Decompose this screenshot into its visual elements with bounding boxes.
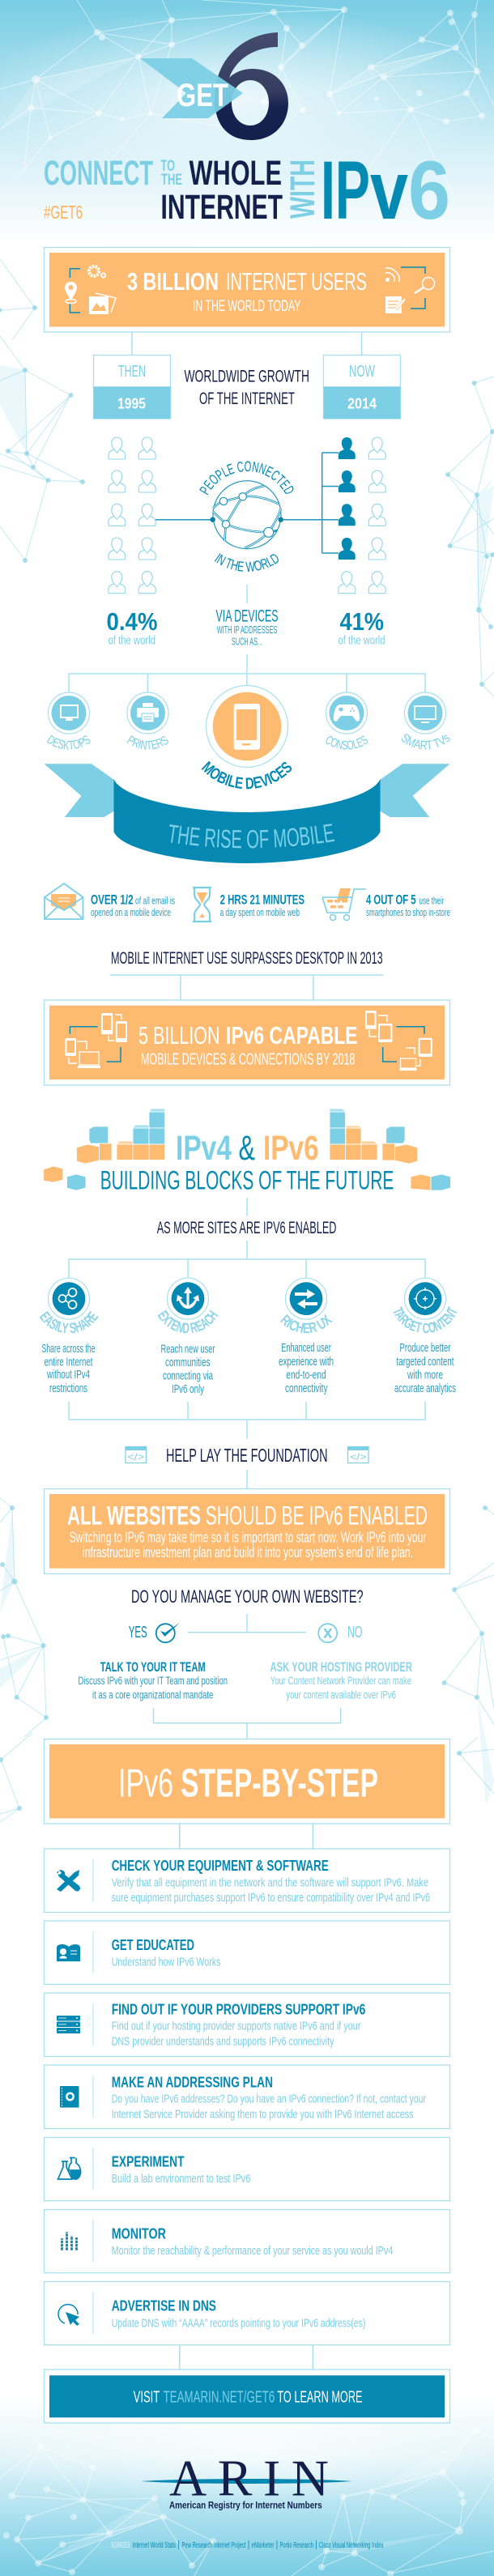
sources: SOURCES: xyxy=(111,2541,131,2550)
device: consoles: CONSOLES xyxy=(326,735,368,750)
text: target content xyxy=(394,1342,456,1395)
logo: ARIN: American Registry for Internet Numbers xyxy=(169,2499,322,2510)
step: monitor xyxy=(44,2209,450,2273)
text: richer UX: connectivity xyxy=(285,1382,328,1395)
panel: visit teamarin.net/get6 xyxy=(44,2369,450,2423)
stat: email: of all email is xyxy=(135,895,175,907)
panel: 5 billion IPv6 capable: MOBILE DEVICES & CONNECTIONS BY 2018 xyxy=(141,1050,355,1068)
icon: cart xyxy=(322,888,366,920)
sources: Pew Research Internet Project xyxy=(181,2541,246,2550)
heading: IPv4 & IPv6: & xyxy=(238,1129,255,1168)
text: extend reach: Reach new user xyxy=(160,1343,215,1356)
panel: IPv6 step-by-step: IPv6 xyxy=(118,1761,173,1805)
text: via devices: WITH IP ADDRESSES xyxy=(217,624,278,636)
stat: 0.4%: 0.4% xyxy=(107,607,157,636)
device: mobile devices: MOBILE DEVICES xyxy=(201,761,292,789)
text: target content: targeted content xyxy=(397,1356,454,1369)
panel: 5 billion IPv6 capable: IPv6 CAPABLE xyxy=(226,1021,358,1050)
sources: Cisco Visual Networking Index xyxy=(319,2541,384,2550)
text: extend reach: connecting via xyxy=(163,1370,214,1383)
text: richer UX xyxy=(279,1342,334,1395)
device: desktops: DESKTOPS xyxy=(47,735,91,750)
stat: email: opened on a mobile device xyxy=(91,906,171,918)
logo: Get6 xyxy=(140,32,288,140)
text: talk to your IT team: Discuss IPv6 with your IT Team and position xyxy=(78,1675,228,1687)
panel: visit teamarin.net/get6: TEAMARIN.NET/GET6 xyxy=(164,2389,275,2407)
panel: now 2014: 2014 xyxy=(347,394,377,411)
icon: binder xyxy=(60,2086,79,2107)
connectors: to visit box xyxy=(180,2345,313,2369)
connectors: to step-by-step xyxy=(154,1708,341,1739)
text: easily share: entire Internet xyxy=(44,1356,92,1369)
icon: code window left: </> xyxy=(128,1451,144,1463)
connector: to sites heading xyxy=(246,1198,248,1216)
title: connect to the whole internet with IPv6 xyxy=(44,144,450,236)
text: via devices: SUCH AS... xyxy=(232,636,262,648)
panel: all websites should be IPv6 enabled xyxy=(44,1488,450,1574)
title: connect to the whole internet with IPv6: CONNECT xyxy=(44,154,153,193)
benefit: target content xyxy=(394,1278,457,1395)
text: via devices: VIA DEVICES xyxy=(215,607,279,626)
step: advertise in DNS: ADVERTISE IN DNS xyxy=(112,2297,216,2314)
sources xyxy=(111,2540,384,2550)
text: easily share: Share across the xyxy=(42,1343,96,1356)
device: printers xyxy=(126,692,169,750)
text: target content: with more xyxy=(407,1369,443,1382)
text: ask your hosting provider: Your Content Network Provider can make xyxy=(270,1675,411,1687)
icon: code window left xyxy=(126,1446,146,1463)
stat: 41% xyxy=(339,607,385,648)
device: desktops xyxy=(47,692,91,750)
background: bottom gradient xyxy=(0,2397,494,2576)
heading: IPv4 & IPv6: IPv4 xyxy=(176,1129,232,1168)
text: target content: Produce better xyxy=(400,1342,451,1355)
title: connect to the whole internet with IPv6: TO xyxy=(160,158,175,175)
heading: help lay the foundation xyxy=(126,1445,368,1466)
people grid: then xyxy=(109,437,155,594)
title: connect to the whole internet with IPv6: THE xyxy=(161,172,182,189)
stat: email: OVER 1/2 xyxy=(91,892,134,908)
panel: visit teamarin.net/get6: VISIT xyxy=(134,2389,160,2407)
ribbon: the rise of mobile: THE RISE OF MOBILE xyxy=(169,824,335,849)
icon: envelope xyxy=(45,884,83,919)
step: check your equipment: CHECK YOUR EQUIPMENT & SOFTWARE xyxy=(112,1857,329,1874)
step: get educated xyxy=(44,1921,450,1984)
choice: yes xyxy=(129,1623,180,1642)
step: find out if your providers support IPv6: Find out if your hosting provider supports native IPv6 and if your xyxy=(112,2020,360,2033)
illustration: building blocks right xyxy=(330,1109,450,1190)
title: connect to the whole internet with IPv6: IP xyxy=(321,144,370,236)
text: richer UX: Enhanced user xyxy=(281,1342,331,1355)
heading: worldwide growth: WORLDWIDE GROWTH xyxy=(185,368,309,386)
logo: Get6: GET xyxy=(177,78,228,113)
stat: 41%: 41% xyxy=(340,607,384,636)
background: top gradient xyxy=(0,0,494,243)
people grid: now xyxy=(339,437,385,594)
stat: shopping xyxy=(322,888,450,920)
step: advertise in DNS: Update DNS with “AAAA” records pointing to your IPv6 address(es) xyxy=(112,2316,365,2330)
heading: IPv4 & IPv6: IPv6 xyxy=(263,1129,319,1168)
network pattern: bottom xyxy=(0,2428,494,2576)
icon: flasks xyxy=(58,2157,81,2179)
heading: worldwide growth: OF THE INTERNET xyxy=(199,390,295,408)
icon: arrows outward xyxy=(177,1287,199,1309)
benefit: extend reach xyxy=(157,1278,219,1396)
icon: share xyxy=(58,1288,76,1309)
heading: worldwide growth xyxy=(185,368,309,408)
stat: hours per day: a day spent on mobile web xyxy=(220,906,300,918)
panel: all websites should be IPv6 enabled: ALL WEBSITES xyxy=(67,1501,201,1531)
text: easily share: restrictions xyxy=(49,1382,87,1395)
text: target content: accurate analytics xyxy=(394,1382,456,1395)
panel: then 1995 xyxy=(94,355,170,419)
device: consoles xyxy=(326,692,368,750)
choice: no xyxy=(318,1624,363,1642)
stat: email xyxy=(45,884,175,919)
icon: exchange arrows xyxy=(295,1289,317,1309)
title: connect to the whole internet with IPv6: 6 xyxy=(408,144,450,236)
icons: right devices xyxy=(365,1011,432,1071)
sources: Portio Research xyxy=(280,2541,313,2550)
hashtag: #GET6 xyxy=(44,202,83,223)
title: connect to the whole internet with IPv6: v xyxy=(370,144,408,236)
panel: IPv6 step-by-step: STEP-BY-STEP xyxy=(181,1761,378,1805)
step: find out if your providers support IPv6: FIND OUT IF YOUR PROVIDERS SUPPORT IPv6 xyxy=(112,2001,365,2018)
benefit: target content: TARGET CONTENT xyxy=(394,1306,457,1333)
text: extend reach xyxy=(160,1343,215,1396)
icon: hourglass xyxy=(193,888,211,922)
connectors: benefits tree bottom xyxy=(69,1402,425,1439)
connector lines: people to globe xyxy=(155,453,339,553)
device: smart TVs: SMART TVs xyxy=(402,734,450,750)
step: monitor: Monitor the reachability & performance of your service as you would IPv4 xyxy=(112,2244,393,2258)
heading: help lay the foundation: HELP LAY THE FOUNDATION xyxy=(166,1445,328,1466)
network pattern: top xyxy=(0,0,494,194)
connectors: first box to then/now xyxy=(132,330,362,355)
text: ask your hosting provider: your content available over IPv6 xyxy=(286,1688,396,1701)
text: talk to your IT team: TALK TO YOUR IT TEAM xyxy=(100,1659,206,1675)
title: connect to the whole internet with IPv6: INTERNET xyxy=(160,188,283,227)
panel: now 2014: NOW xyxy=(349,363,375,381)
title: connect to the whole internet with IPv6: WITH xyxy=(283,160,322,219)
step: monitor: MONITOR xyxy=(112,2225,166,2242)
benefit: easily share xyxy=(39,1278,99,1395)
heading: IPv4 & IPv6 xyxy=(176,1129,319,1168)
step: advertise in DNS xyxy=(44,2282,450,2345)
curved label: people connected: PEOPLE CONNECTED xyxy=(199,461,293,496)
stat: 41%: of the world xyxy=(339,634,385,648)
connectors: yes/no fork xyxy=(188,1614,306,1633)
text: extend reach: IPv6 only xyxy=(172,1383,204,1396)
text: richer UX: end-to-end xyxy=(286,1369,326,1382)
globe: people connected in the world xyxy=(199,461,293,572)
step: get educated: Understand how IPv6 Works xyxy=(112,1955,220,1969)
panel: 3 billion internet users: 3 BILLION xyxy=(127,267,219,296)
stat: hours per day: 2 HRS 21 MINUTES xyxy=(220,892,304,908)
benefit: extend reach: EXTEND REACH xyxy=(157,1310,219,1333)
sources: Internet World Stats xyxy=(132,2541,176,2550)
icon: tools xyxy=(57,1870,80,1892)
stat: shopping: 4 OUT OF 5 xyxy=(366,892,416,908)
title: connect to the whole internet with IPv6: WHOLE xyxy=(190,154,282,193)
curved label: in the world: IN THE WORLD xyxy=(214,553,279,572)
benefit: easily share: EASILY SHARE xyxy=(39,1310,99,1333)
step: experiment: Build a lab environment to test IPv6 xyxy=(112,2172,250,2186)
step: find out if your providers support IPv6 xyxy=(44,1993,450,2057)
text: easily share xyxy=(42,1343,96,1395)
choice: yes: YES xyxy=(129,1624,147,1641)
connectors: to steps xyxy=(180,1824,313,1849)
panel: visit teamarin.net/get6: TO LEARN MORE xyxy=(277,2389,363,2407)
icon: code window right xyxy=(348,1446,368,1463)
stat: 0.4% xyxy=(107,607,157,648)
network pattern: left and right side, lower xyxy=(0,1498,494,1822)
icon: server xyxy=(57,2016,80,2033)
benefit: richer UX: RICHER UX xyxy=(280,1314,332,1333)
text: ask your hosting provider: ASK YOUR HOSTING PROVIDER xyxy=(270,1659,412,1675)
panel: 3 billion internet users: IN THE WORLD TODAY xyxy=(193,297,301,315)
panel: 3 billion internet users xyxy=(44,248,450,332)
network pattern: left and right side, upper xyxy=(0,259,494,696)
device: smart TVs xyxy=(402,692,450,750)
icon: cursor click xyxy=(58,2305,79,2326)
icon: book xyxy=(57,1944,80,1961)
panel: then 1995: THEN xyxy=(118,363,146,381)
device: mobile devices xyxy=(201,685,292,789)
icon: level bars xyxy=(62,2232,76,2250)
background: bottom glow xyxy=(0,2389,494,2502)
icons: left devices xyxy=(65,1013,127,1068)
connectors: benefits tree top xyxy=(69,1241,425,1278)
panel: now 2014 xyxy=(324,355,400,419)
logo: ARIN: ARIN xyxy=(169,2450,329,2507)
icon: target xyxy=(414,1288,437,1309)
text: via devices xyxy=(215,607,279,648)
stat: shopping: use their xyxy=(419,895,445,907)
stat: 0.4%: of the world xyxy=(109,634,155,648)
text: talk to your IT team: it as a core organizational mandate xyxy=(92,1688,213,1701)
text: extend reach: communities xyxy=(165,1356,211,1369)
icon: code window right: </> xyxy=(350,1451,366,1463)
panel: then 1995: 1995 xyxy=(117,394,146,411)
step: get educated: GET EDUCATED xyxy=(112,1936,194,1953)
heading: as more sites are IPv6 enabled: AS MORE SITES ARE IPV6 ENABLED xyxy=(157,1219,337,1237)
choice: no: NO xyxy=(347,1624,363,1641)
connectors: devices tree xyxy=(69,585,425,692)
illustration: building blocks left xyxy=(44,1109,165,1190)
step: make an addressing plan: MAKE AN ADDRESSING PLAN xyxy=(112,2073,273,2090)
step: experiment: EXPERIMENT xyxy=(112,2153,185,2170)
heading: do you manage your own website: DO YOU MANAGE YOUR OWN WEBSITE? xyxy=(131,1586,364,1607)
panel: 5 billion IPv6 capable xyxy=(44,1000,450,1085)
panel: IPv6 step-by-step xyxy=(44,1739,450,1824)
icons: left cluster xyxy=(65,266,116,314)
stat: hours per day xyxy=(193,888,304,922)
benefit: richer UX xyxy=(279,1278,334,1395)
panel: 3 billion internet users: INTERNET USERS xyxy=(226,267,367,296)
step: find out if your providers support IPv6: DNS provider understands and supports IPv6 connectivity xyxy=(112,2035,334,2049)
ribbon: the rise of mobile xyxy=(44,764,450,863)
background: top glow xyxy=(0,8,494,186)
panel: 5 billion IPv6 capable: 5 BILLION xyxy=(138,1021,220,1050)
step: check your equipment xyxy=(44,1849,450,1913)
text: talk to your IT team xyxy=(78,1659,228,1701)
icons: right cluster xyxy=(385,267,434,313)
connectors: to 5 billion box xyxy=(110,975,384,1000)
step: experiment xyxy=(44,2138,450,2201)
step: make an addressing plan xyxy=(44,2065,450,2128)
text: richer UX: experience with xyxy=(279,1356,334,1369)
device: printers: PRINTERS xyxy=(126,735,168,750)
connector: to websites box xyxy=(246,1470,248,1488)
text: ask your hosting provider xyxy=(270,1659,412,1701)
text: easily share: without IPv4 xyxy=(46,1369,90,1382)
sources: eMarketer xyxy=(251,2541,275,2550)
